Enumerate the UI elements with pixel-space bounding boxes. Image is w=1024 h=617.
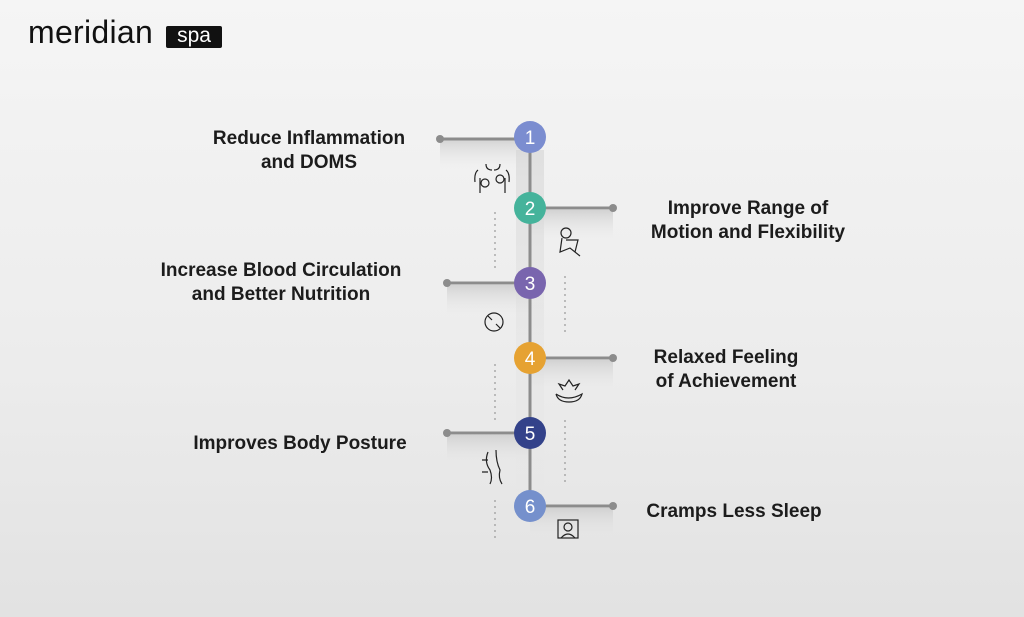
text: step 2: Improve Range of — [668, 198, 828, 219]
step circles: 5 — [525, 424, 535, 445]
step circles: 6 — [525, 497, 535, 518]
logo — [28, 14, 222, 50]
text: step 2: Motion and Flexibility — [651, 222, 845, 243]
icons — [475, 164, 582, 538]
text: step 4 — [654, 347, 798, 392]
text: step 1 — [213, 128, 405, 173]
step circles: 2 — [525, 199, 535, 220]
step circles — [514, 121, 546, 522]
step circles: 1 — [525, 128, 535, 149]
text: step 1: and DOMS — [261, 152, 357, 173]
text: step 4: Relaxed Feeling — [654, 347, 798, 368]
text: step 3 — [161, 260, 401, 305]
text: step 6: Cramps Less Sleep — [646, 501, 822, 522]
text: step 2 — [651, 198, 845, 243]
text: step 3: and Better Nutrition — [192, 284, 370, 305]
logo: spa — [177, 24, 211, 47]
dotted guides — [495, 212, 565, 540]
text: step 5: Improves Body Posture — [193, 433, 407, 454]
text: step 3: Increase Blood Circulation — [161, 260, 401, 281]
text: step 1: Reduce Inflammation — [213, 128, 405, 149]
step circles: 4 — [525, 349, 536, 370]
step circles: 3 — [525, 274, 535, 295]
shadows — [440, 139, 613, 550]
text: step 4: of Achievement — [656, 371, 796, 392]
connector lines — [436, 135, 617, 510]
logo: meridian — [28, 14, 153, 50]
